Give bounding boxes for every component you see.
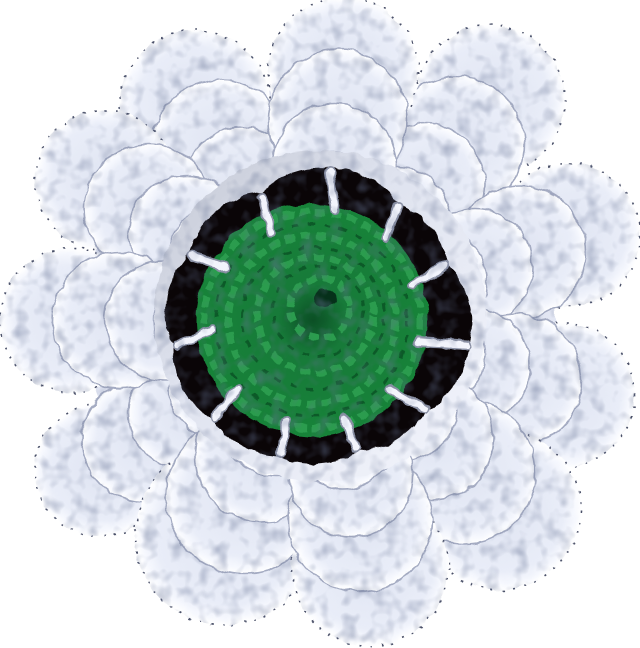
white inner rim	[154, 150, 486, 482]
petal: bottom	[288, 381, 448, 646]
petal: top	[268, 0, 418, 259]
black centre opening	[166, 168, 472, 464]
petal: left lower	[34, 339, 269, 536]
petal: left	[0, 248, 257, 392]
petal: bottom right	[349, 353, 580, 590]
petal: top left	[120, 30, 314, 273]
petal: right upper	[383, 163, 640, 333]
petal: bottom left	[135, 365, 332, 625]
white thread spokes	[177, 172, 466, 453]
petal: right lower	[381, 302, 635, 467]
petal: left upper	[35, 110, 273, 308]
petal: top right	[346, 25, 565, 271]
green crochet centre	[196, 204, 428, 436]
petal base fill	[85, 85, 555, 555]
